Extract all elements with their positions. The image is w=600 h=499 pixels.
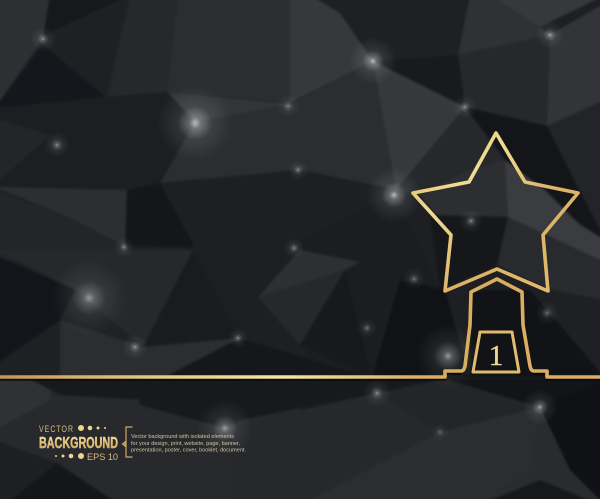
gold baseline shadow xyxy=(0,374,600,380)
number 1: 1 xyxy=(489,340,503,372)
text block: description: for your design, print, website, page, banner, xyxy=(131,441,240,447)
text block: description: presentation, poster, cover, booklet, document. xyxy=(131,448,246,454)
label: EPS 10: EPS 10 xyxy=(87,452,118,463)
light glows xyxy=(30,21,564,456)
dots top row xyxy=(78,425,106,431)
gold line with trophy base xyxy=(0,279,600,377)
icon: first place plaque xyxy=(473,332,519,372)
icon: bracket xyxy=(122,427,132,457)
text block: vector background badge xyxy=(39,424,118,463)
label: BACKGROUND: BACKGROUND xyxy=(39,435,118,452)
dots bottom row xyxy=(55,453,84,459)
icon: gold star outline xyxy=(413,133,578,291)
text block: description xyxy=(131,434,246,454)
text block: description: Vector background with isolated elements xyxy=(131,434,234,440)
label: VECTOR: VECTOR xyxy=(39,424,74,435)
